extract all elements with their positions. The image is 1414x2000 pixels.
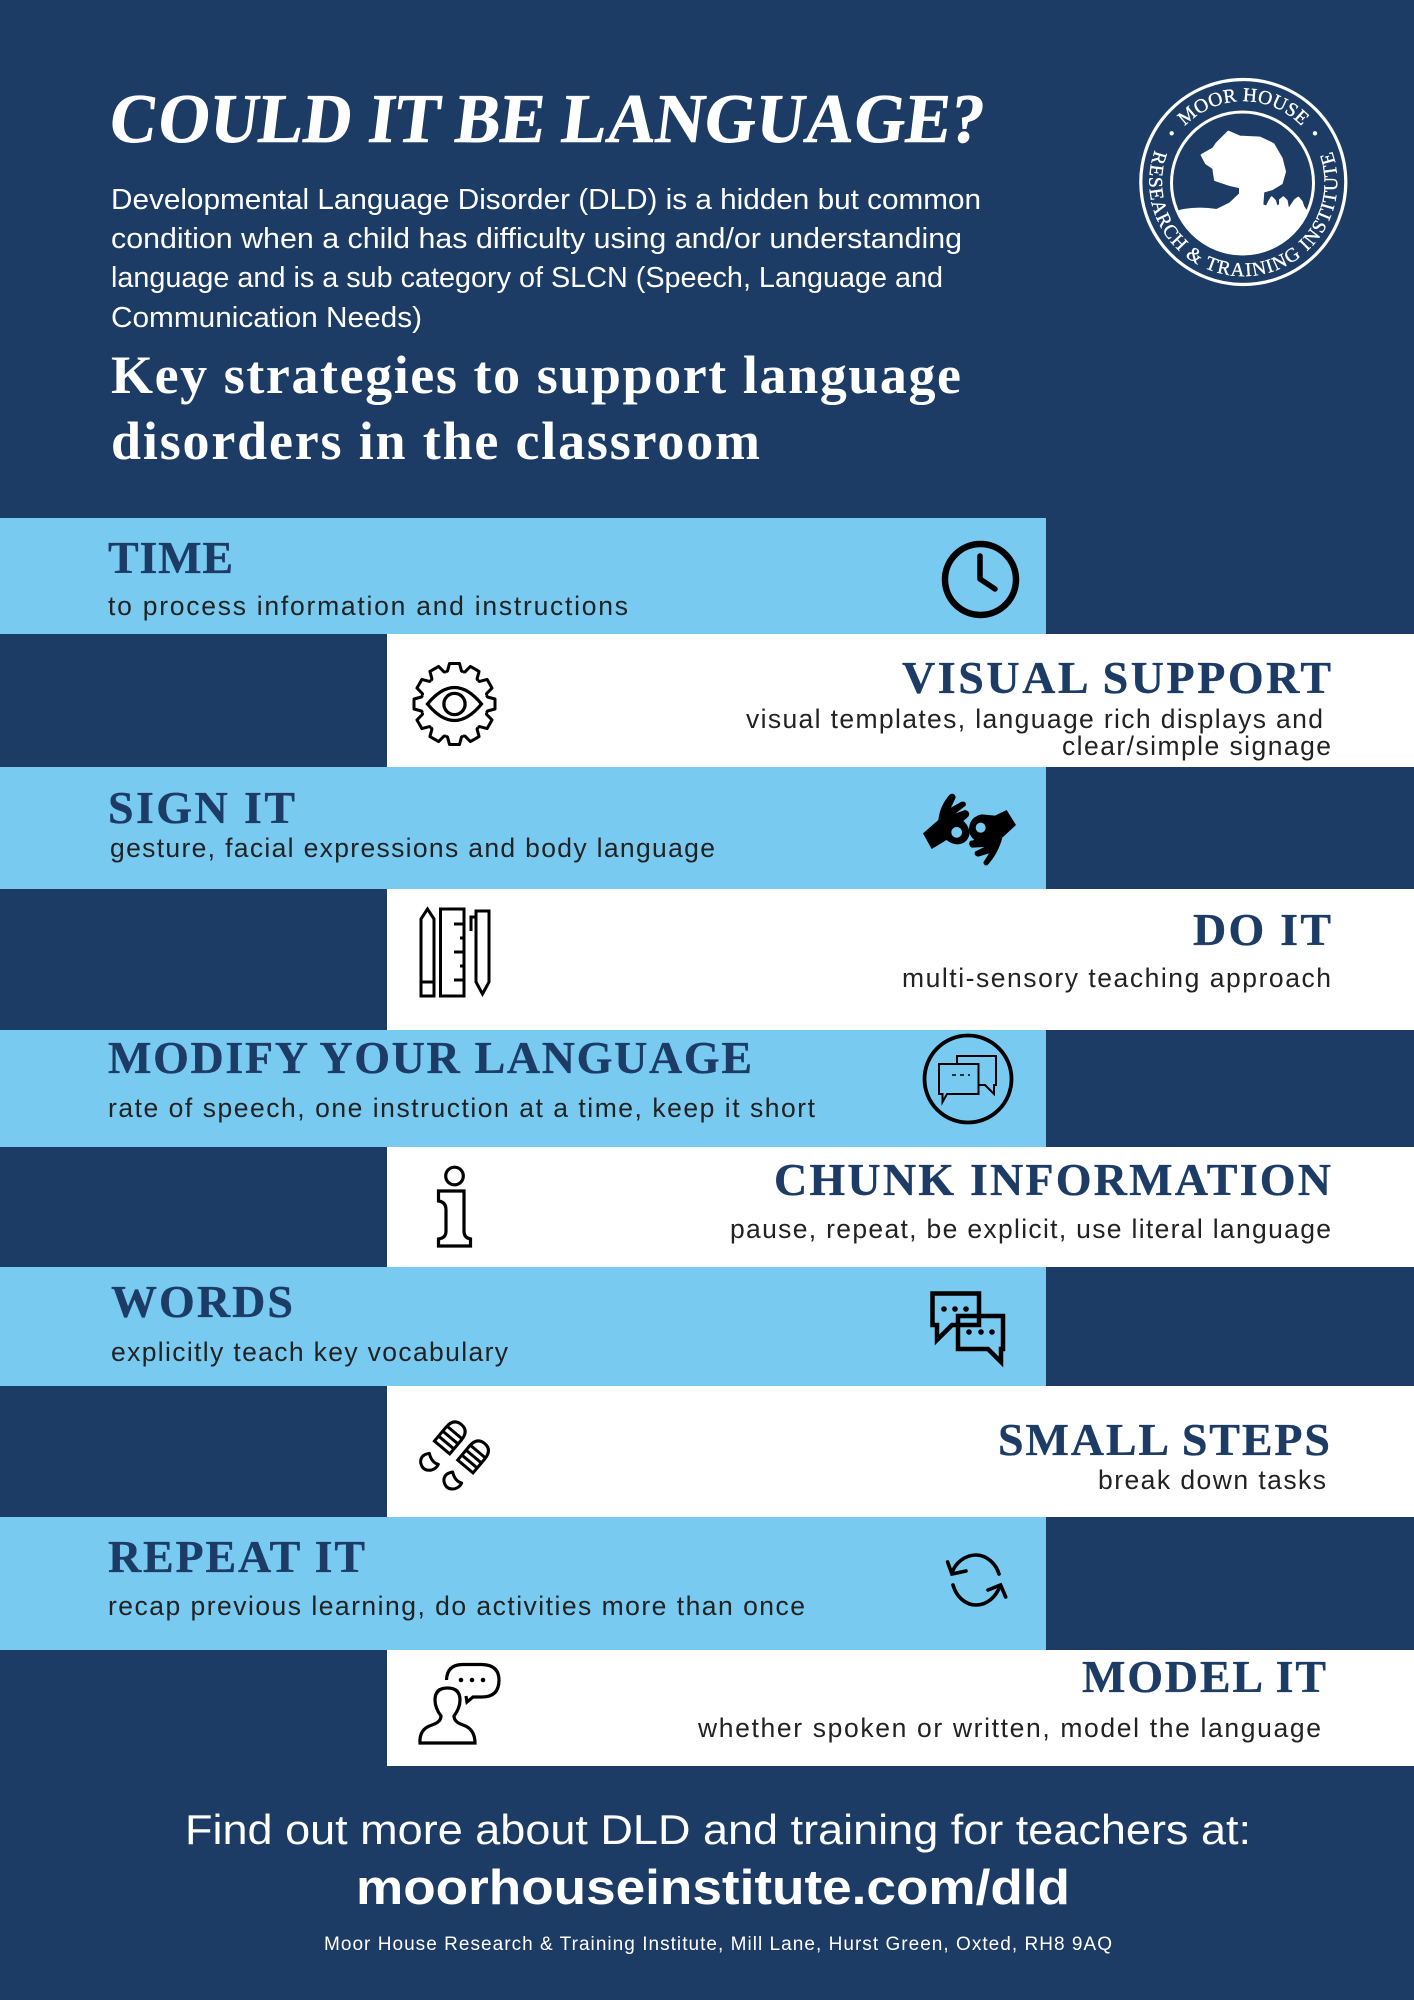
heading: sign it: SIGN IT (108, 782, 295, 833)
text: repeat it: recap previous learning, do activities more than once (108, 1591, 805, 1621)
text: time: to process information and instructions (108, 591, 628, 621)
panel: repeat it (0, 1517, 1046, 1650)
intro paragraph: condition when a child has difficulty using and/or understanding (111, 223, 962, 255)
text: visual support (746, 704, 1331, 761)
icon: chat in circle (924, 1036, 1012, 1122)
heading: chunk information: CHUNK INFORMATION (774, 1154, 1331, 1205)
panel: do it (387, 889, 1414, 1030)
icon: information (438, 1167, 470, 1246)
footer call to action: Find out more about DLD and training for teachers at: (185, 1806, 1251, 1853)
text: sign it: gesture, facial expressions and body language (110, 833, 715, 863)
icon: gear with eye (414, 664, 495, 744)
intro paragraph: Communication Needs) (111, 302, 422, 334)
heading: words: WORDS (111, 1276, 293, 1327)
heading: modify your language: MODIFY YOUR LANGUAGE (108, 1032, 752, 1083)
icon: repeat arrows (948, 1555, 1006, 1605)
text: visual support: clear/simple signage (1062, 731, 1331, 761)
panel: chunk information (387, 1147, 1414, 1267)
text: visual support: visual templates, language rich displays and (746, 704, 1323, 734)
text: model it: whether spoken or written, model the language (697, 1713, 1321, 1743)
panel: modify your language (0, 1030, 1046, 1147)
panel: small steps (387, 1386, 1414, 1517)
intro paragraph: Developmental Language Disorder (DLD) is a hidden but common (111, 184, 981, 216)
heading: repeat it: REPEAT IT (108, 1531, 365, 1582)
intro paragraph (111, 184, 981, 334)
icon: pencil, ruler, pen (421, 909, 489, 996)
heading: small steps: SMALL STEPS (998, 1414, 1330, 1465)
panel: visual support (387, 634, 1414, 767)
logo: Moor House Research & Training Institute (1139, 78, 1348, 286)
heading: model it: MODEL IT (1082, 1651, 1326, 1702)
panel: words (0, 1267, 1046, 1386)
subheading: Key strategies to support language (111, 345, 961, 405)
text: words: explicitly teach key vocabulary (111, 1337, 509, 1367)
footer link: moorhouseinstitute.com/dld (356, 1861, 1070, 1915)
icon: footprints (421, 1418, 492, 1489)
subheading (111, 345, 961, 471)
intro paragraph: language and is a sub category of SLCN (Speech, Language and (111, 262, 943, 294)
icon: clock (945, 544, 1016, 615)
icon: speech bubbles (932, 1294, 1003, 1362)
icon: person speaking (420, 1664, 499, 1743)
logo: Moor House Research & Training Institute: RESEARCH & TRAINING INSTITUTE (1148, 150, 1338, 277)
text: chunk information: pause, repeat, be explicit, use literal language (730, 1214, 1331, 1244)
subheading: disorders in the classroom (111, 411, 760, 471)
panel: model it (387, 1650, 1414, 1766)
text: do it: multi-sensory teaching approach (902, 963, 1331, 993)
heading: visual support: VISUAL SUPPORT (902, 652, 1331, 703)
panel: sign it (0, 767, 1046, 889)
title: COULD IT BE LANGUAGE? (105, 80, 990, 158)
heading: do it: DO IT (1193, 904, 1331, 955)
footer address: Moor House Research & Training Institute, Mill Lane, Hurst Green, Oxted, RH8 9AQ (324, 1934, 1112, 1955)
text: modify your language: rate of speech, one instruction at a time, keep it short (108, 1093, 816, 1123)
icon: signing hands (923, 794, 1016, 865)
panel: time (0, 518, 1046, 634)
text: small steps: break down tasks (1098, 1465, 1326, 1495)
logo: Moor House Research & Training Institute: MOOR HOUSE (1176, 88, 1310, 126)
heading: time: TIME (108, 532, 233, 583)
